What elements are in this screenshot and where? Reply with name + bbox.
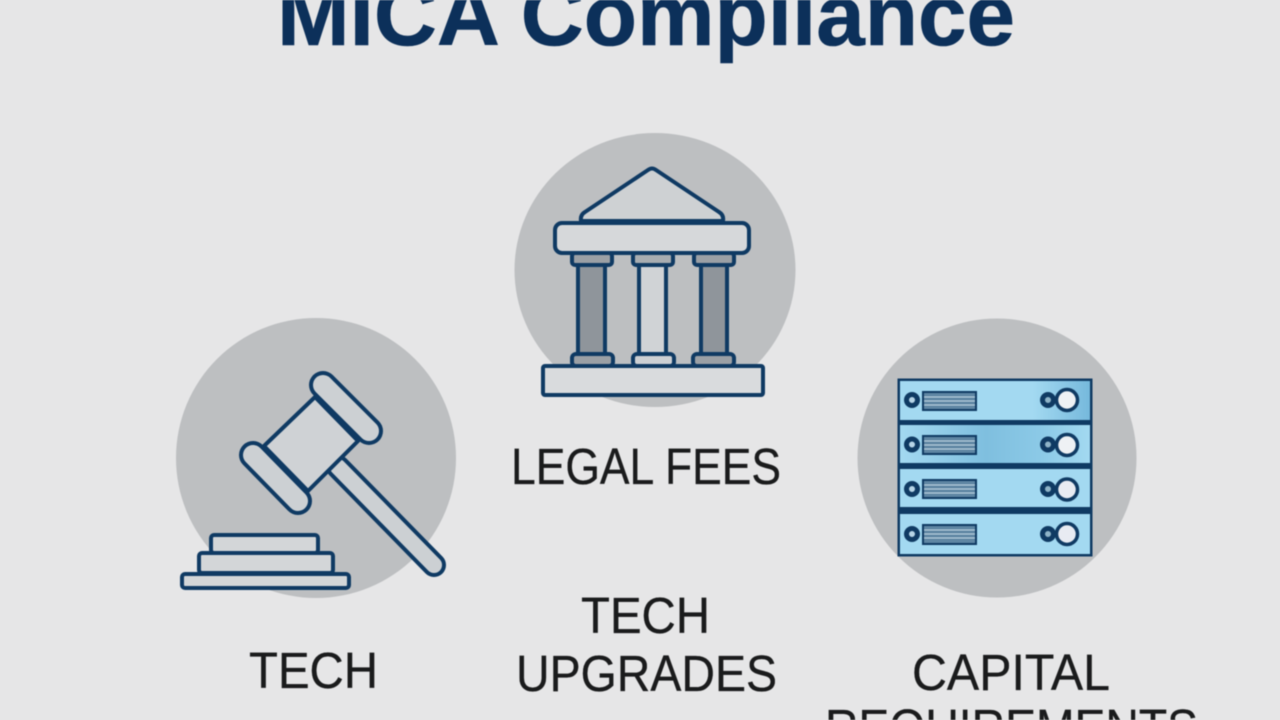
server unit 3 — [900, 469, 1090, 507]
icon: server rack — [898, 378, 1092, 556]
label: tech upgrades: TECH — [581, 587, 710, 644]
label: legal fees: LEGAL FEES — [511, 438, 781, 495]
icon: classical building — [543, 168, 763, 395]
server unit 2 — [900, 425, 1090, 463]
panel: tech gavel — [176, 318, 456, 699]
server unit 4 — [900, 514, 1090, 554]
server unit 1 — [900, 381, 1090, 420]
label: tech upgrades: UPGRADES — [516, 645, 777, 702]
icon background circle: server — [858, 318, 1136, 598]
icon: gavel — [182, 385, 434, 588]
label: capital requirements: CAPITAL — [912, 644, 1110, 701]
icon background circle: gavel — [176, 318, 456, 598]
label: tech: TECH — [249, 642, 378, 699]
label: tech upgrades — [516, 587, 777, 702]
label: capital requirements — [825, 644, 1198, 720]
panel: capital requirements — [825, 318, 1198, 720]
panel: legal fees — [511, 133, 796, 495]
icon background circle: legal fees — [514, 133, 796, 407]
